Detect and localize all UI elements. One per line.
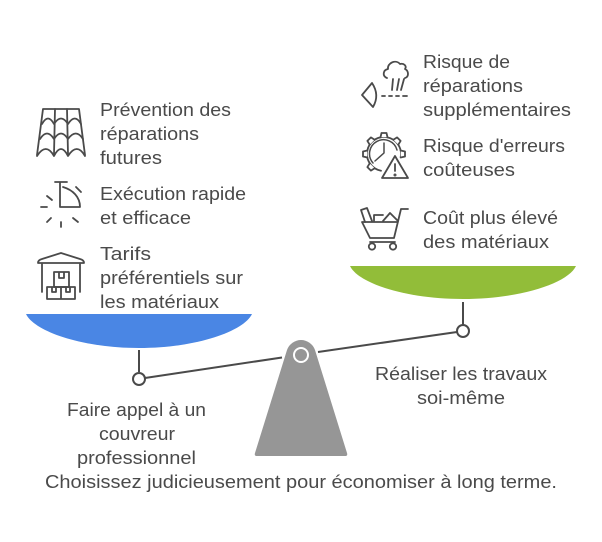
label: hire a roofer: Faire appel à un xyxy=(67,400,206,420)
icon: gear with warning triangle xyxy=(363,133,408,178)
text: do-it-yourself risks: coûteuses xyxy=(423,160,515,180)
text: professional benefits xyxy=(100,100,246,312)
text: professional benefits: Exécution rapide xyxy=(100,184,246,204)
fulcrum xyxy=(255,340,347,456)
text: do-it-yourself risks: Risque d'erreurs xyxy=(423,136,565,156)
label: do it yourself xyxy=(375,364,547,408)
text: professional benefits: Tarifs xyxy=(100,244,151,264)
left pan: blue xyxy=(26,314,252,348)
icon: roof tiles xyxy=(37,109,85,156)
label: hire a roofer: couvreur xyxy=(99,424,175,444)
text: do-it-yourself risks: Risque de xyxy=(423,52,510,72)
text: professional benefits: préférentiels sur xyxy=(100,268,243,288)
text: do-it-yourself risks: des matériaux xyxy=(423,232,549,252)
balance beam xyxy=(133,302,469,385)
text: do-it-yourself risks: supplémentaires xyxy=(423,100,571,120)
text: professional benefits: Prévention des xyxy=(100,100,231,120)
text: professional benefits: futures xyxy=(100,148,162,168)
text: professional benefits: les matériaux xyxy=(100,292,219,312)
label: do it yourself: soi-même xyxy=(417,388,505,408)
icon: fast execution timer xyxy=(41,182,81,227)
text: do-it-yourself risks xyxy=(423,52,571,252)
text: do-it-yourself risks: Coût plus élevé xyxy=(423,208,558,228)
caption: Choisissez judicieusement pour économiser à long terme. xyxy=(45,472,557,492)
text: professional benefits: et efficace xyxy=(100,208,191,228)
text: do-it-yourself risks: réparations xyxy=(423,76,523,96)
right pan: green xyxy=(350,266,576,299)
label: hire a roofer xyxy=(67,400,206,468)
icon: shopping cart with materials xyxy=(361,208,408,250)
label: do it yourself: Réaliser les travaux xyxy=(375,364,547,384)
text: professional benefits: réparations xyxy=(100,124,199,144)
icon: roof rain leak xyxy=(362,62,408,107)
label: hire a roofer: professionnel xyxy=(77,448,196,468)
icon: warehouse with boxes xyxy=(38,253,84,299)
